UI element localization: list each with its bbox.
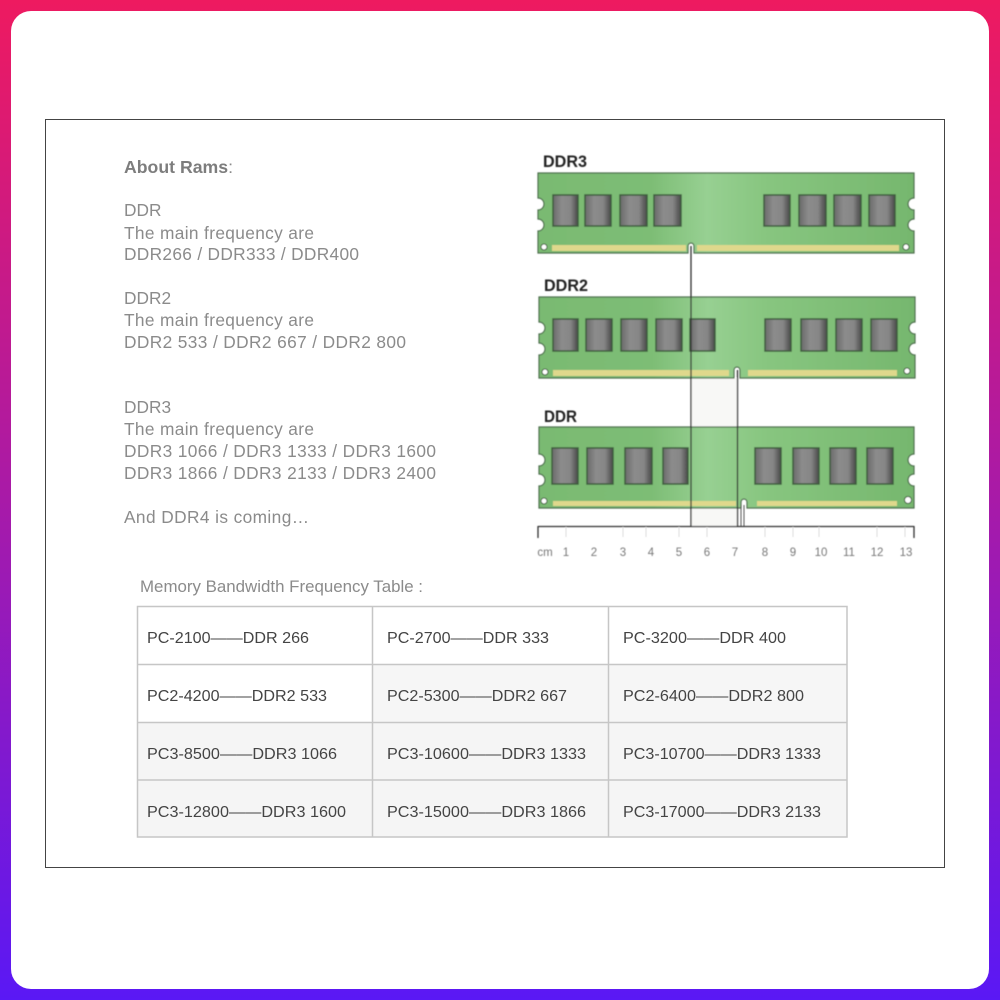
notch alignment lines: [691, 246, 744, 526]
label: DDR: DDR: [544, 407, 577, 426]
ruler: 9: [790, 547, 796, 559]
ruler: 7: [732, 547, 738, 559]
text: DDR2 frequencies: DDR2 533 / DDR2 667 / DDR2 800: [124, 332, 406, 352]
RAM diagram: [537, 152, 915, 559]
text: DDR frequencies: [124, 200, 359, 264]
row 4: PC3-17000——DDR3 2133: [623, 804, 821, 821]
text: DDR2 frequencies: The main frequency are: [124, 310, 314, 330]
ruler: 11: [843, 547, 855, 559]
ruler: 13: [900, 547, 912, 559]
row 3: PC3-8500——DDR3 1066: [147, 746, 337, 763]
ruler: 12: [871, 547, 883, 559]
module: DDR2: [539, 276, 915, 378]
ruler: 5: [676, 547, 682, 559]
ruler: 4: [648, 547, 655, 559]
ruler: 8: [762, 547, 768, 559]
row 3: PC3-10600——DDR3 1333: [387, 746, 586, 763]
text: DDR3 frequencies: [124, 397, 436, 483]
text: DDR2 frequencies: DDR2: [124, 288, 171, 308]
heading: about rams: About Rams:: [124, 157, 233, 177]
ruler: [537, 526, 914, 559]
row 4: PC3-15000——DDR3 1866: [387, 804, 586, 821]
ruler: 6: [704, 547, 710, 559]
row 4: PC3-12800——DDR3 1600: [147, 804, 346, 821]
ruler: 3: [620, 547, 626, 559]
ruler: 10: [815, 547, 827, 559]
text: DDR3 frequencies: DDR3 1866 / DDR3 2133 / DDR3 2400: [124, 463, 436, 483]
module: DDR3: [538, 152, 914, 253]
text: DDR3 frequencies: The main frequency are: [124, 419, 314, 439]
table: memory bandwidth frequency: [137, 606, 847, 837]
row 4: [147, 804, 821, 821]
ruler: 2: [591, 547, 597, 559]
ruler: 1: [563, 547, 569, 559]
row 3: PC3-10700——DDR3 1333: [623, 746, 821, 763]
text: DDR2 frequencies: [124, 288, 406, 352]
row 2: PC2-6400——DDR2 800: [623, 688, 804, 705]
text: DDR frequencies: The main frequency are: [124, 223, 314, 243]
row 2: PC2-5300——DDR2 667: [387, 688, 567, 705]
table title: Memory Bandwidth Frequency Table :: [140, 577, 423, 596]
text: DDR frequencies: DDR: [124, 200, 161, 220]
ruler: cm: [537, 547, 553, 559]
module: DDR: [539, 407, 914, 508]
text: DDR frequencies: DDR266 / DDR333 / DDR400: [124, 244, 359, 264]
row 2: PC2-4200——DDR2 533: [147, 688, 327, 705]
framed panel: [46, 120, 944, 868]
row 1: PC-2100——DDR 266: [147, 630, 309, 647]
text block: about rams: [124, 157, 436, 527]
text: DDR3 frequencies: DDR3 1066 / DDR3 1333 / DDR3 1600: [124, 441, 436, 461]
label: DDR2: DDR2: [544, 276, 588, 295]
row 1: PC-3200——DDR 400: [623, 630, 786, 647]
row 2: [147, 688, 804, 705]
text: DDR4 note: And DDR4 is coming…: [124, 507, 309, 527]
text: DDR3 frequencies: DDR3: [124, 397, 171, 417]
row 1: [147, 630, 786, 647]
row 3: [147, 746, 821, 763]
label: DDR3: DDR3: [543, 152, 587, 171]
diagram: pale band between notches: [691, 378, 737, 526]
row 1: PC-2700——DDR 333: [387, 630, 549, 647]
